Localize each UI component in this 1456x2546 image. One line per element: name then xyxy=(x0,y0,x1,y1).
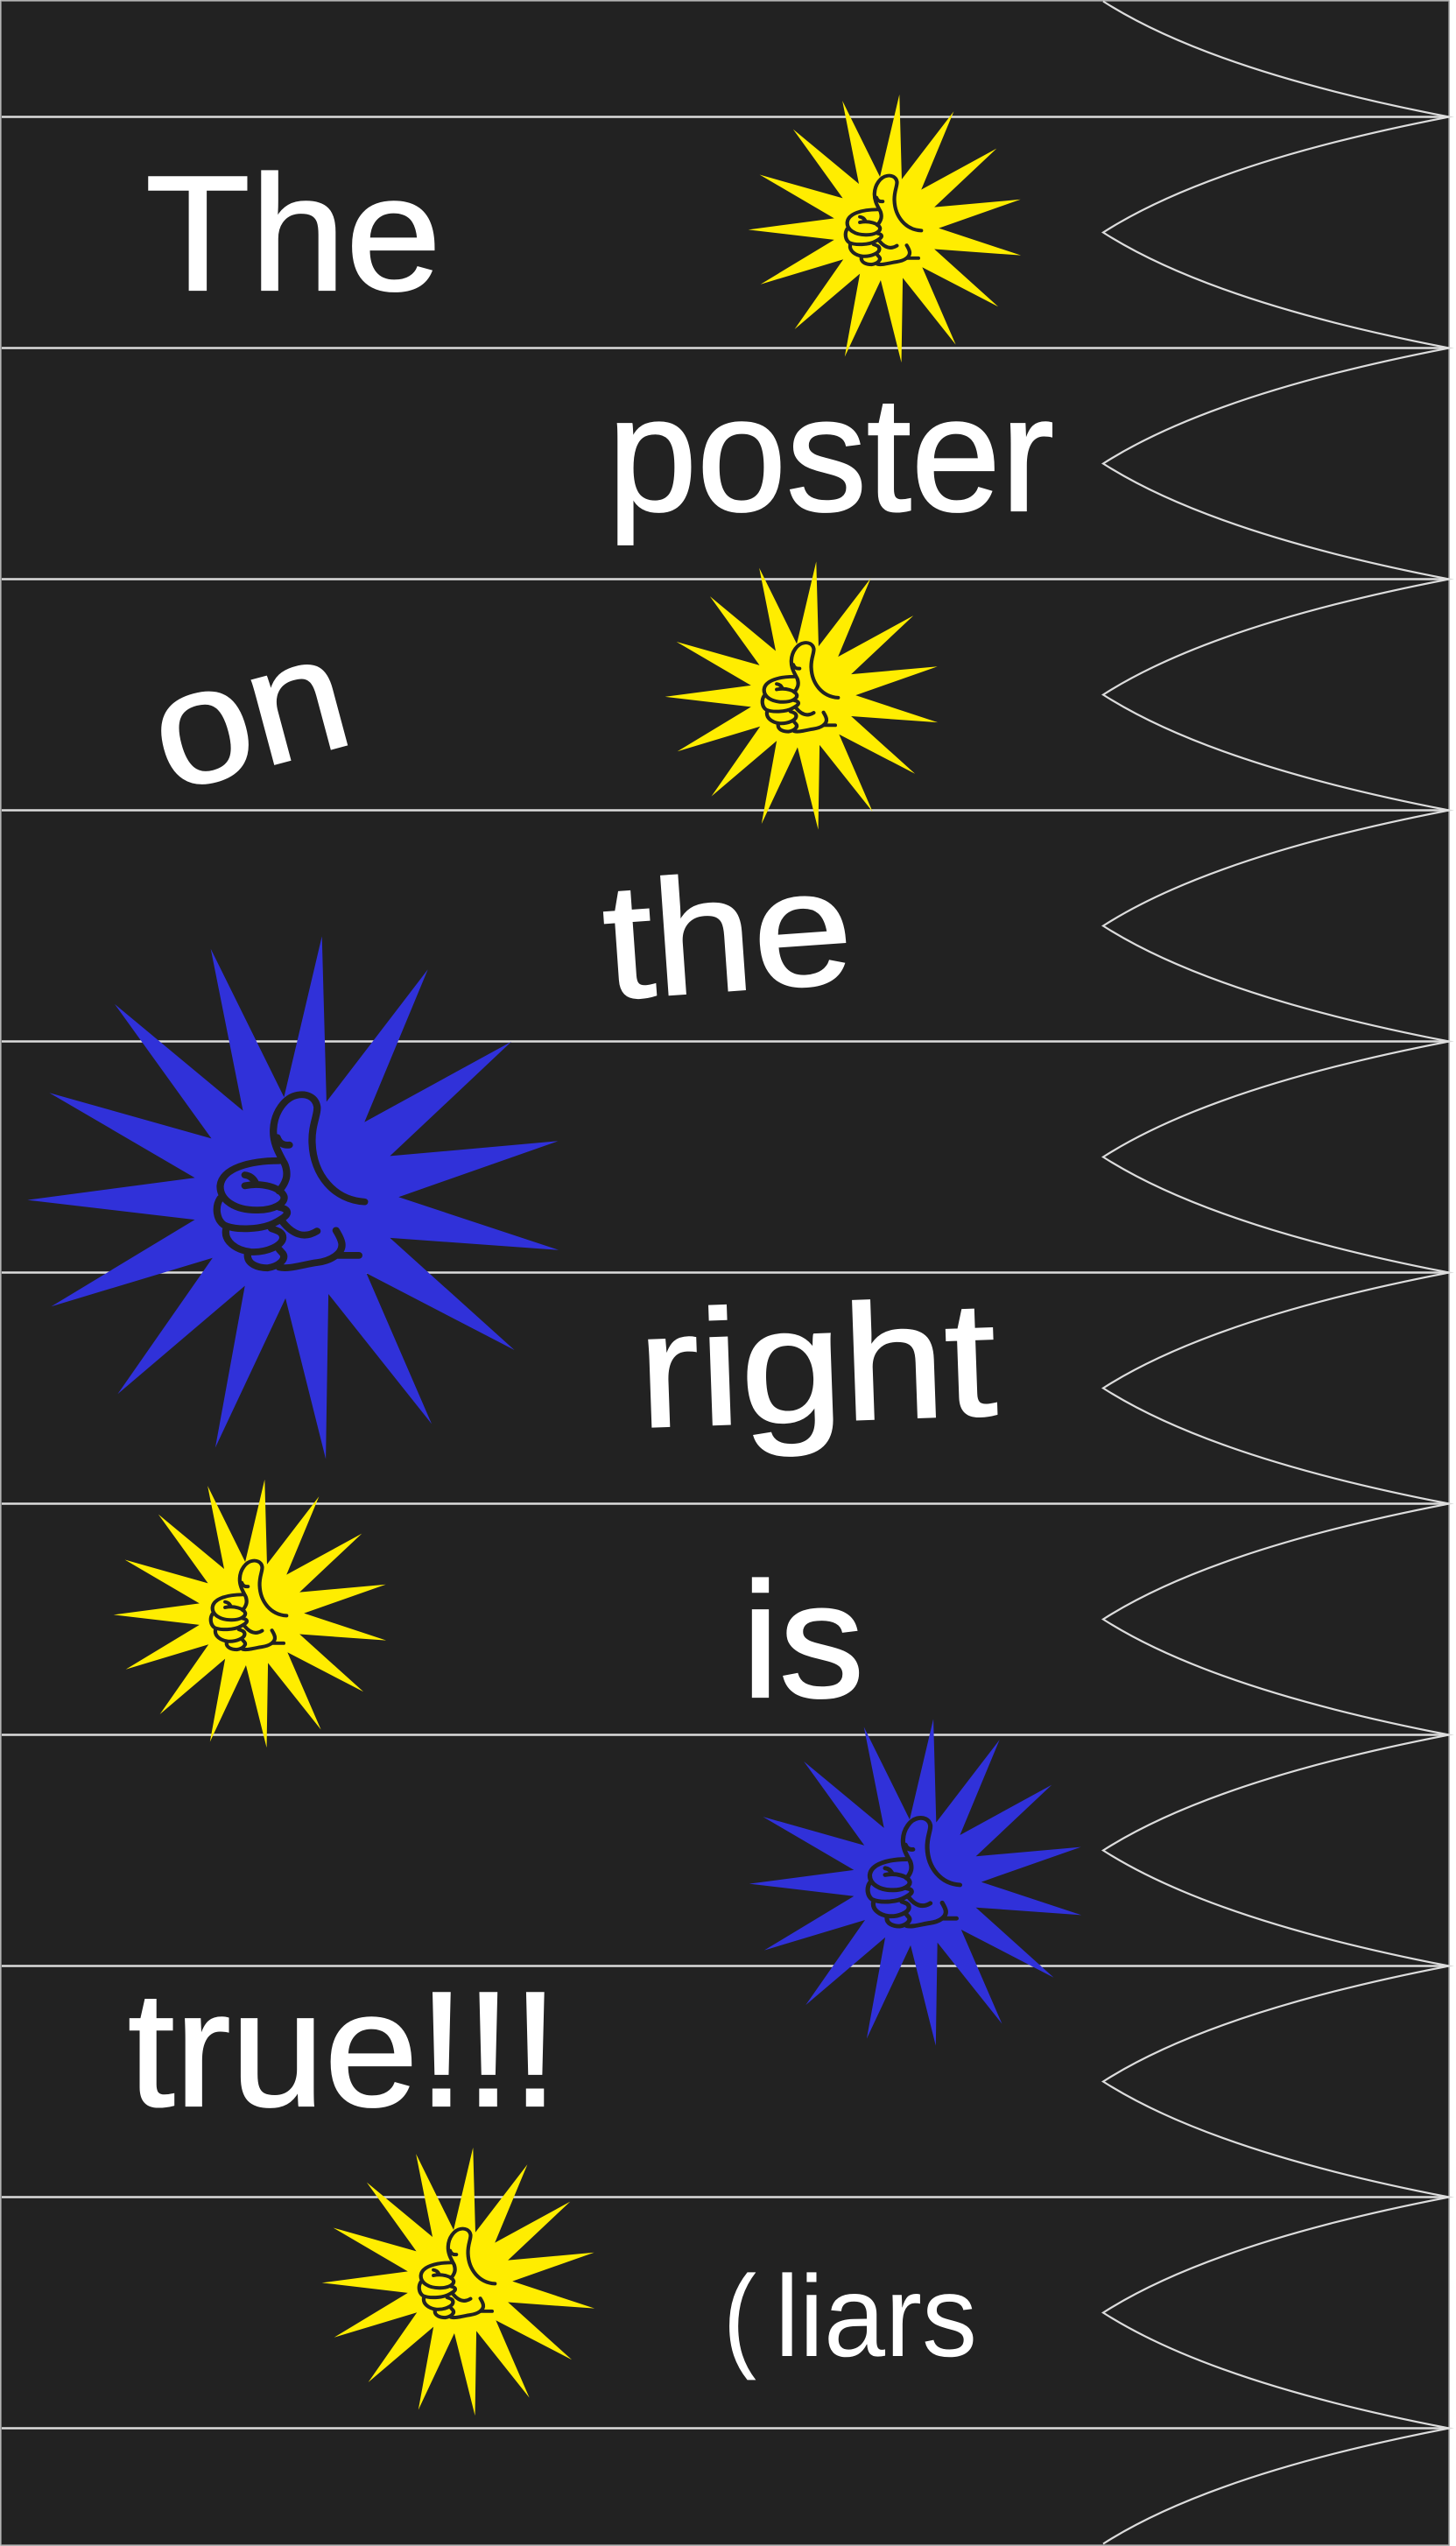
word: poster: poster xyxy=(608,362,1054,545)
icon: yellow burst with thumbs up, top xyxy=(749,95,1021,362)
word: true!!!: true!!! xyxy=(128,1958,559,2141)
word: right (tilted): right xyxy=(635,1267,999,1462)
icon: large blue burst with thumbs up xyxy=(27,936,559,1459)
icon: yellow burst with thumbs up, beside on xyxy=(665,561,938,830)
curved zigzag line on right edge xyxy=(1103,2,1449,2544)
word: ( liars: liars xyxy=(775,2252,977,2381)
icon: yellow burst with thumbs up, left of is xyxy=(114,1480,386,1748)
icon: medium blue burst with thumbs up xyxy=(749,1719,1081,2046)
word: on (tilted): on xyxy=(130,599,367,826)
word: ( liars: ( xyxy=(723,2252,756,2381)
icon: yellow burst with thumbs up, bottom xyxy=(322,2148,594,2416)
word: The: The xyxy=(145,142,441,325)
word: the (tilted): the xyxy=(597,834,858,1034)
word: is: is xyxy=(742,1549,864,1732)
